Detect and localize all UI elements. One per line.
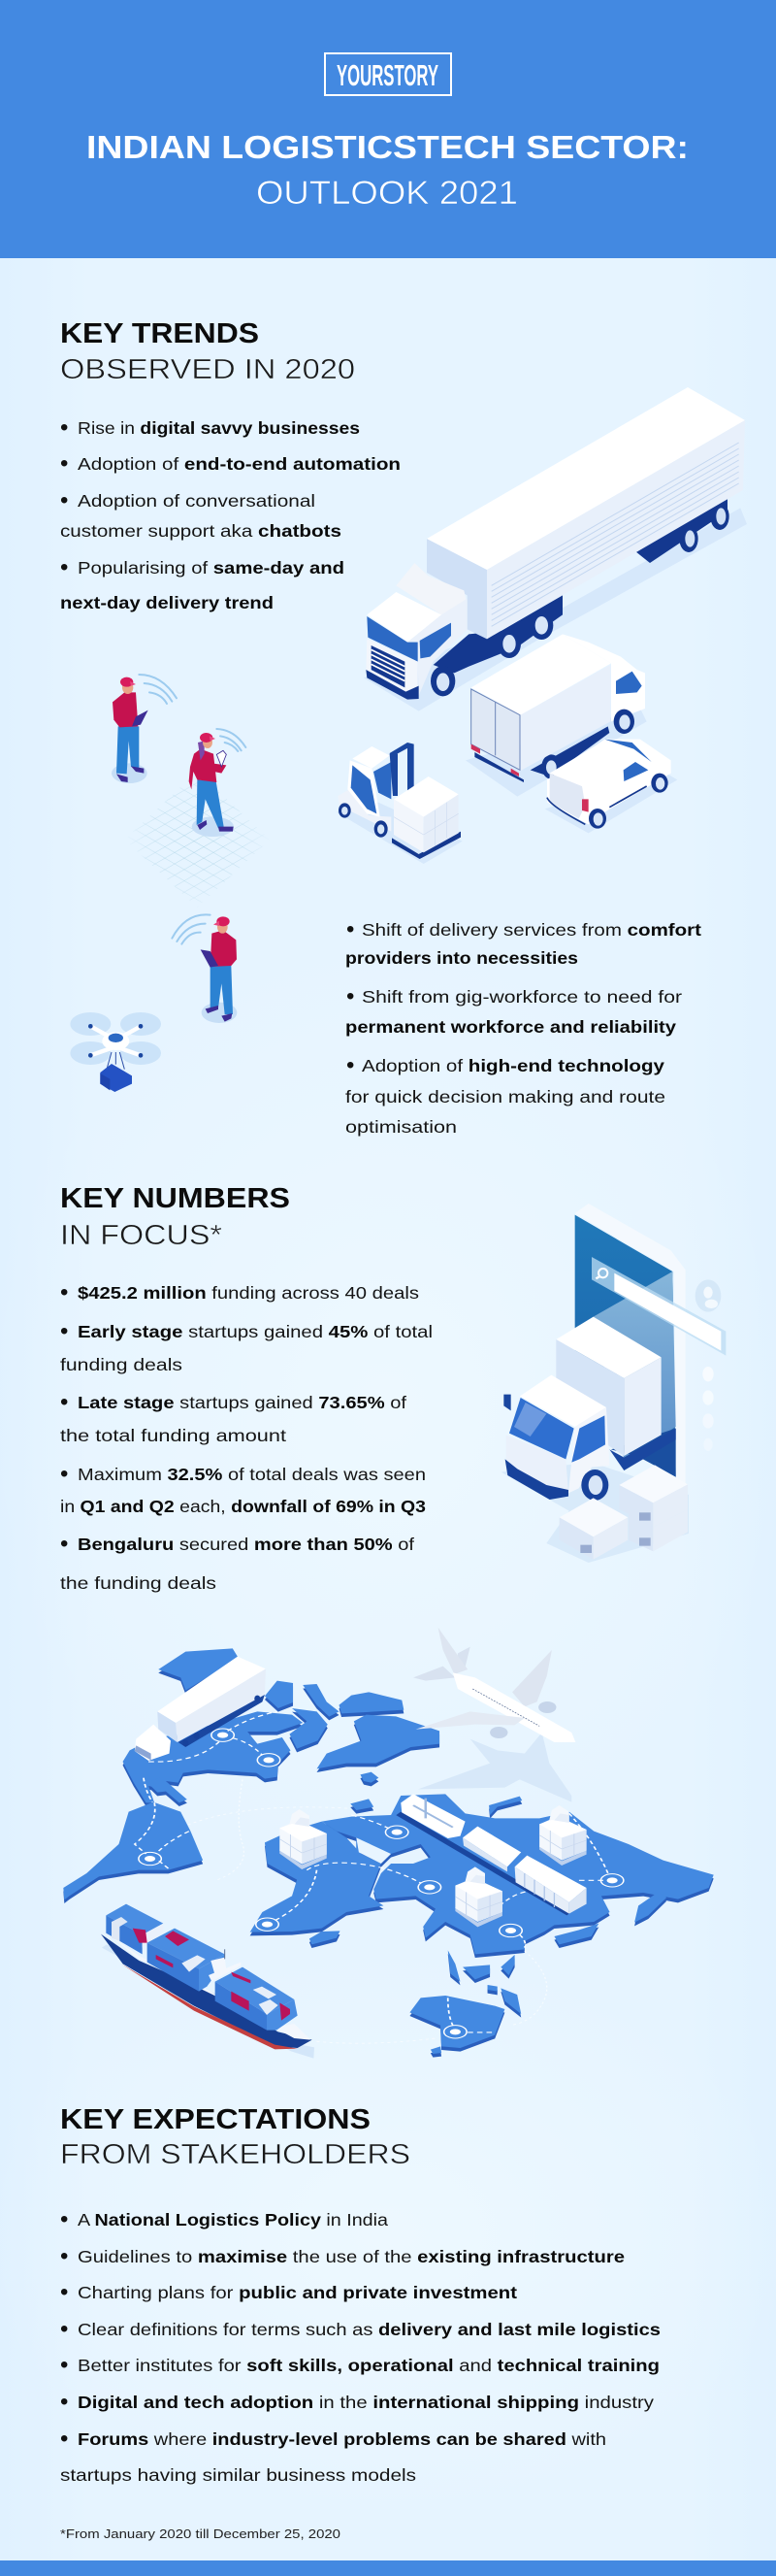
route lines xyxy=(135,1711,609,2032)
location pins xyxy=(139,1729,624,2038)
illustration: workers and drone xyxy=(70,675,270,1092)
text block: trends list two xyxy=(345,916,701,1137)
text block: trends list one: • xyxy=(60,487,68,513)
footnote: *From January 2020 till December 25, 2020 xyxy=(60,2526,340,2541)
text block: trends list two: Shift from gig-workforce to need for xyxy=(362,987,682,1007)
text block: key numbers list: Late stage startups gained 73.65% of xyxy=(78,1393,406,1412)
heading: key numbers: KEY NUMBERS xyxy=(60,1183,290,1214)
illustration: container ship xyxy=(101,1904,314,2059)
text block: expectations list: • xyxy=(60,2206,68,2232)
title: OUTLOOK 2021 xyxy=(256,175,518,212)
heading: key numbers: IN FOCUS* xyxy=(60,1220,222,1251)
text block: key numbers list: • xyxy=(60,1531,68,1557)
text block: trends list one: • xyxy=(60,554,68,580)
text block: trends list two: providers into necessities xyxy=(345,948,578,968)
text block: key numbers list: • xyxy=(60,1279,68,1305)
delivery truck xyxy=(466,634,647,797)
faint connection loops xyxy=(188,1779,547,2043)
cargo stacks xyxy=(279,1805,587,1927)
text block: trends list two: permanent workforce and reliability xyxy=(345,1017,676,1037)
text block: expectations list: startups having similar business models xyxy=(60,2465,416,2485)
logo: YourStory xyxy=(325,53,451,95)
panel: header xyxy=(0,0,776,258)
text block: trends list one: • xyxy=(60,414,68,441)
text block: expectations list: • xyxy=(60,2352,68,2378)
text block: trends list two: optimisation xyxy=(345,1117,457,1137)
text block: key numbers list: in Q1 and Q2 each, downfall of 69% in Q3 xyxy=(60,1497,426,1516)
text block: trends list one: Adoption of end-to-end automation xyxy=(78,454,401,474)
text block: expectations list: • xyxy=(60,2389,68,2415)
text block: trends list one: next-day delivery trend xyxy=(60,593,274,612)
ground shadow xyxy=(501,1463,689,1563)
text block: expectations list: Charting plans for public and private investment xyxy=(78,2283,517,2302)
heading: key expectations: FROM STAKEHOLDERS xyxy=(60,2139,410,2170)
text block: key numbers list: Maximum 32.5% of total deals was seen xyxy=(78,1465,426,1484)
heading: key numbers xyxy=(60,1183,290,1251)
truck xyxy=(503,1317,676,1501)
airplane xyxy=(413,1628,575,1742)
text block: trends list one: Popularising of same-day and xyxy=(78,558,344,578)
big truck xyxy=(364,387,747,711)
text block: expectations list: Guidelines to maximise the use of the existing infrastructure xyxy=(78,2247,625,2266)
train xyxy=(399,1794,587,1914)
heading: key trends: OBSERVED IN 2020 xyxy=(60,354,355,385)
phone xyxy=(575,1204,726,1488)
text block: key numbers list: • xyxy=(60,1389,68,1415)
text block: key numbers list: the total funding amount xyxy=(60,1426,286,1445)
text block: trends list two: • xyxy=(346,1052,354,1078)
text block: expectations list: • xyxy=(60,2243,68,2269)
text block: key numbers list: the funding deals xyxy=(60,1573,216,1593)
text block: key numbers list: • xyxy=(60,1461,68,1487)
text block: key numbers list: $425.2 million funding across 40 deals xyxy=(78,1283,419,1303)
title xyxy=(86,130,689,212)
text block: key numbers list xyxy=(60,1279,433,1593)
illustration: world map logistics xyxy=(63,1628,714,2058)
worker one xyxy=(112,675,177,783)
illustration: vehicles xyxy=(337,387,747,864)
heading: key trends: KEY TRENDS xyxy=(60,318,259,349)
text block: trends list two: for quick decision making and route xyxy=(345,1087,665,1106)
map truck xyxy=(135,1657,266,1761)
drone xyxy=(70,1012,161,1092)
text block: trends list two: Adoption of high-end technology xyxy=(362,1056,664,1075)
van xyxy=(545,740,677,833)
worker three xyxy=(172,914,237,1023)
text block: expectations list: Digital and tech adoption in the international shipping industry xyxy=(78,2393,654,2412)
text block: trends list one: customer support aka chatbots xyxy=(60,521,341,541)
text block: expectations list: • xyxy=(60,2426,68,2452)
text block: trends list two: Shift of delivery services from comfort xyxy=(362,920,701,940)
text block: expectations list: • xyxy=(60,2316,68,2342)
text block: key numbers list: Bengaluru secured more than 50% of xyxy=(78,1535,414,1554)
parcels xyxy=(560,1465,688,1560)
text block: trends list one xyxy=(60,414,401,612)
title: INDIAN LOGISTICSTECH SECTOR: xyxy=(86,130,689,166)
logo: YourStory: YOURSTORY xyxy=(337,58,438,92)
heading: key expectations xyxy=(60,2104,410,2170)
text block: expectations list xyxy=(60,2206,661,2485)
text block: expectations list: Clear definitions for terms such as delivery and last mile logistics xyxy=(78,2320,661,2339)
text block: key numbers list: • xyxy=(60,1318,68,1344)
text block: trends list one: Adoption of conversational xyxy=(78,491,315,511)
text block: trends list one: Rise in digital savvy businesses xyxy=(78,418,360,438)
text block: expectations list: • xyxy=(60,2279,68,2305)
text block: trends list two: • xyxy=(346,916,354,942)
continents xyxy=(63,1648,714,2058)
heading: key trends xyxy=(60,318,355,385)
text block: expectations list: Forums where industry-level problems can be shared with xyxy=(78,2429,606,2449)
illustration: phone with delivery truck xyxy=(501,1204,726,1563)
worker two xyxy=(189,729,245,837)
plane shadow xyxy=(418,1733,571,1802)
text block: expectations list: A National Logistics Policy in India xyxy=(78,2210,388,2229)
text block: trends list one: • xyxy=(60,450,68,477)
floor grid xyxy=(132,780,264,903)
text block: trends list two: • xyxy=(346,983,354,1009)
heading: key expectations: KEY EXPECTATIONS xyxy=(60,2104,371,2135)
text block: expectations list: Better institutes for soft skills, operational and technical training xyxy=(78,2356,660,2375)
text block: key numbers list: Early stage startups gained 45% of total xyxy=(78,1322,433,1341)
forklift xyxy=(337,743,463,864)
footer bar xyxy=(0,2560,776,2576)
text block: key numbers list: funding deals xyxy=(60,1355,182,1374)
